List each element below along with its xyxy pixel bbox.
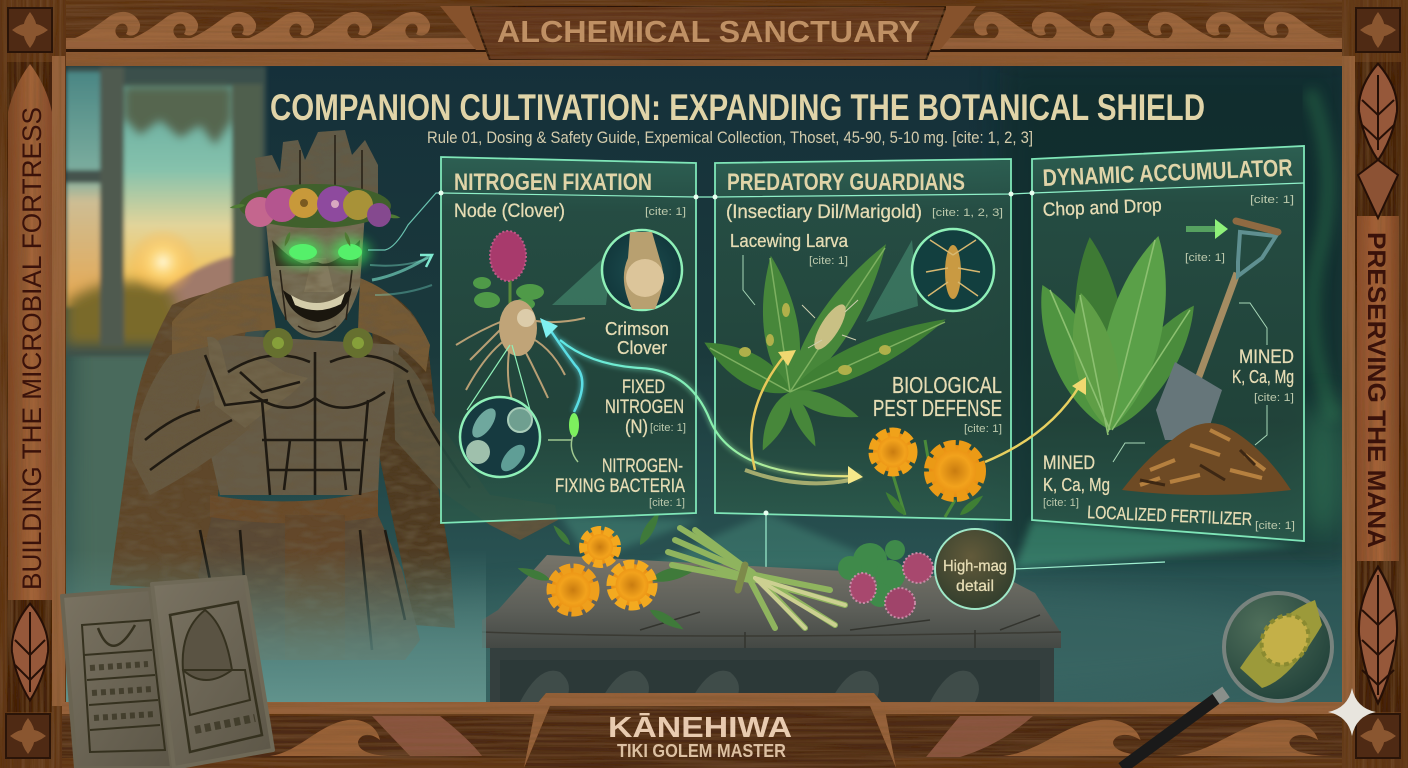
left tablet [62,589,172,768]
golem belt [210,490,378,524]
name: KĀNEHIWA [608,712,792,744]
right side label: PRESERVING THE MANA [1362,232,1390,548]
golem torso [190,335,400,495]
cite: [cite: 1] [645,206,686,218]
golem flower wreath [229,184,401,247]
left side label: BUILDING THE MICROBIAL FORTRESS [17,107,47,590]
inset: nitrogen-fixing bacteria [460,345,540,477]
altar stone slab [482,555,1061,648]
golem neck and head [265,212,365,338]
illustration: comfrey leaves [1022,229,1210,441]
heading: dynamic accumulator: DYNAMIC ACCUMULATOR [1042,155,1293,192]
panel: dynamic accumulator: K, Ca, Mg [1232,367,1294,387]
panel: nitrogen fixation: [cite: 1] [650,422,686,434]
label: mined right: MINED [1239,347,1294,368]
illustration: marigolds [873,432,985,518]
high-mag detail lens: High-mag [943,558,1007,575]
heading: nitrogen fixation: NITROGEN FIXATION [454,169,652,196]
panel: predatory guardians: [cite: 1] [809,255,848,267]
magnifying glass [1122,593,1332,768]
arrow: green [1186,219,1228,239]
altar base [490,648,1054,702]
golem left arm [132,345,250,495]
inset: root nodules [552,230,682,310]
label: crimson clover: Crimson [605,319,669,339]
subtitle: Rule 01, Dosing & Safety Guide, Expemical Collection, Thoset, 45-90, 5-10 mg. [cite: 1, 2, 3] [427,128,1033,147]
main title [270,87,1205,147]
label: insectiary: (Insectiary Dil/Marigold) [726,202,922,223]
label: biological pest defense: BIOLOGICAL [892,372,1002,398]
panel: dynamic accumulator: [cite: 1] [1255,520,1295,532]
golem smile [283,288,352,322]
illustration: mulch pile [1122,423,1291,495]
glowing bacterium [548,413,579,462]
altar [482,555,1061,702]
marigold bouquet on altar [516,509,701,633]
stone tablets [62,577,273,768]
panel: dynamic accumulator: [cite: 1] [1043,497,1079,509]
arrow: nitrogen trail from bacteria to root [540,318,582,412]
left column [0,0,66,768]
golem right arm [393,350,558,540]
golem skirt [198,515,420,660]
high-mag detail lens [935,529,1015,609]
main title: COMPANION CULTIVATION: EXPANDING THE BOTANICAL SHIELD [270,87,1205,128]
right tablet [152,577,273,768]
panel: predatory guardians: PEST DEFENSE [873,395,1002,421]
sparkle icon [1328,688,1376,736]
panel: dynamic accumulator [1022,146,1304,541]
panel: predatory guardians [697,159,1011,520]
golem buckles [263,328,373,358]
window with sunset [66,66,266,356]
label: nitrogen-fixing bacteria: NITROGEN- [602,456,683,477]
label: lacewing larva: Lacewing Larva [730,231,849,251]
title banner: alchemical sanctuary: ALCHEMICAL SANCTUARY [497,14,920,49]
panel: nitrogen fixation: (N) [625,417,648,438]
panel header connector line [438,183,1304,516]
label: localized fertilizer: LOCALIZED FERTILIZER [1087,502,1253,529]
panel: nitrogen fixation: [cite: 1] [649,497,685,509]
arrow: trail to marigolds [560,340,863,484]
illustration: shovel [1156,221,1278,440]
title banner: alchemical sanctuary [440,6,976,60]
label: node clover: Node (Clover) [454,201,565,222]
golem glowing eyes [280,238,370,266]
heading: predatory guardians: PREDATORY GUARDIANS [727,169,965,196]
glow lines from golem to panel [368,193,441,295]
illustration: serrated leaf with pests [697,235,952,454]
lemongrass bundle on altar [668,528,845,628]
light beams below panels [560,513,1304,570]
golem wood crown [255,130,378,195]
illustration: crimson clover plant with roots [456,231,585,400]
label: chop and drop: Chop and Drop [1042,195,1162,221]
panel: nitrogen fixation [441,157,696,523]
clover bunch on altar [838,540,933,618]
golem hand sign [207,337,308,428]
label: fixed nitrogen: FIXED [622,377,665,398]
panel: dynamic accumulator: [cite: 1] [1254,392,1294,404]
illustration: lacewing larva on leaf [802,300,858,354]
golem fur cape collar [172,276,430,385]
high-mag detail lens: detail [956,578,994,595]
cite: [cite: 1, 2, 3] [932,207,1003,219]
label: mined left: MINED [1043,453,1095,474]
cite: [cite: 1] [1185,252,1225,264]
golem figure [132,130,558,660]
golem cape back [110,285,455,628]
name plaque [524,693,896,768]
panel: nitrogen fixation: FIXING BACTERIA [555,476,685,497]
panel: nitrogen fixation: Clover [617,338,667,358]
panel: predatory guardians: [cite: 1] [964,423,1002,435]
panel: dynamic accumulator: K, Ca, Mg [1043,475,1110,495]
panel: nitrogen fixation: NITROGEN [605,397,684,418]
inset: lacewing larva [866,229,994,322]
arrow: marigold to comfrey [985,377,1086,462]
arrow: trail to leaf [751,350,796,470]
role: TIKI GOLEM MASTER [617,741,786,761]
bottom carved bar [62,702,1342,768]
background scene [60,60,1350,710]
right column [1342,0,1408,768]
cite: [cite: 1] [1250,194,1294,206]
mist overlay [66,550,486,705]
top carved panel [0,0,1408,66]
